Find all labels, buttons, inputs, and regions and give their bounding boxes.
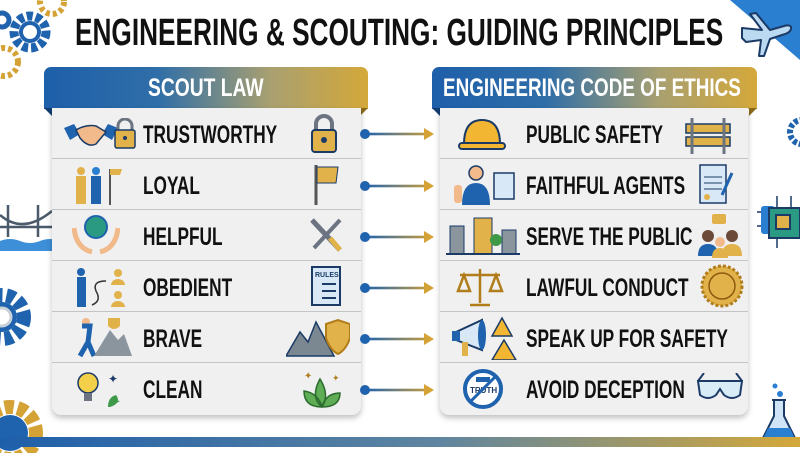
header: scout law [44, 67, 368, 109]
row: brave [52, 312, 361, 363]
bottom bar [0, 437, 800, 447]
row: speak up for safety: SPEAK UP FOR SAFETY [526, 325, 728, 353]
row: public safety: PUBLIC SAFETY [526, 121, 663, 149]
header: engineering code of ethics: ENGINEERING CODE OF ETHICS [443, 74, 741, 102]
row: serve the public: SERVE THE PUBLIC [526, 223, 692, 251]
list: ethics values [440, 108, 748, 415]
decoration: flask [762, 384, 796, 437]
row: lawful conduct: LAWFUL CONDUCT [526, 274, 689, 302]
header: engineering code of ethics [432, 67, 757, 109]
decoration: top-left gears [0, 0, 67, 79]
row: obedient: OBEDIENT [143, 274, 232, 302]
row: speak up for safety [440, 312, 748, 363]
row: loyal: LOYAL [143, 172, 200, 200]
decoration: circuit chip [757, 196, 800, 248]
row: clean: ✦ [304, 371, 312, 382]
decoration: bottom-left gold gear [0, 400, 43, 453]
header folds [432, 108, 757, 116]
header: scout law: SCOUT LAW [148, 74, 264, 102]
row: lawful conduct [440, 261, 748, 312]
list: scout law values [52, 108, 361, 415]
arrows: connectors [360, 128, 434, 396]
row: trustworthy: TRUSTWORTHY [143, 121, 277, 149]
row: avoid deception: AVOID DECEPTION [526, 376, 685, 404]
row: obedient: RULES [315, 272, 339, 279]
row: loyal [52, 159, 361, 210]
row: faithful agents [440, 159, 748, 210]
row: clean [77, 371, 341, 408]
decoration: bridge [0, 205, 52, 251]
row: serve the public [440, 210, 748, 261]
panel: scout law [44, 67, 368, 421]
row: clean: ✦ [108, 372, 118, 386]
row: faithful agents: FAITHFUL AGENTS [526, 172, 685, 200]
header folds [44, 108, 368, 116]
decoration: top-right blue triangle [730, 0, 800, 60]
title: ENGINEERING & SCOUTING: GUIDING PRINCIPLES [75, 12, 723, 54]
decoration: left blue gear [0, 288, 31, 346]
row: avoid deception: TRUTH [470, 386, 497, 395]
row: avoid deception [463, 369, 744, 409]
row: helpful: HELPFUL [143, 223, 223, 251]
row: brave: BRAVE [143, 325, 202, 353]
row: clean: ✦ [332, 373, 340, 383]
row: trustworthy [52, 108, 361, 159]
icon: airplane [741, 12, 792, 57]
row: obedient [52, 261, 361, 312]
decoration: right gear [787, 117, 800, 147]
row: clean: CLEAN [143, 376, 202, 404]
row: public safety [440, 108, 748, 159]
row: helpful [52, 210, 361, 261]
